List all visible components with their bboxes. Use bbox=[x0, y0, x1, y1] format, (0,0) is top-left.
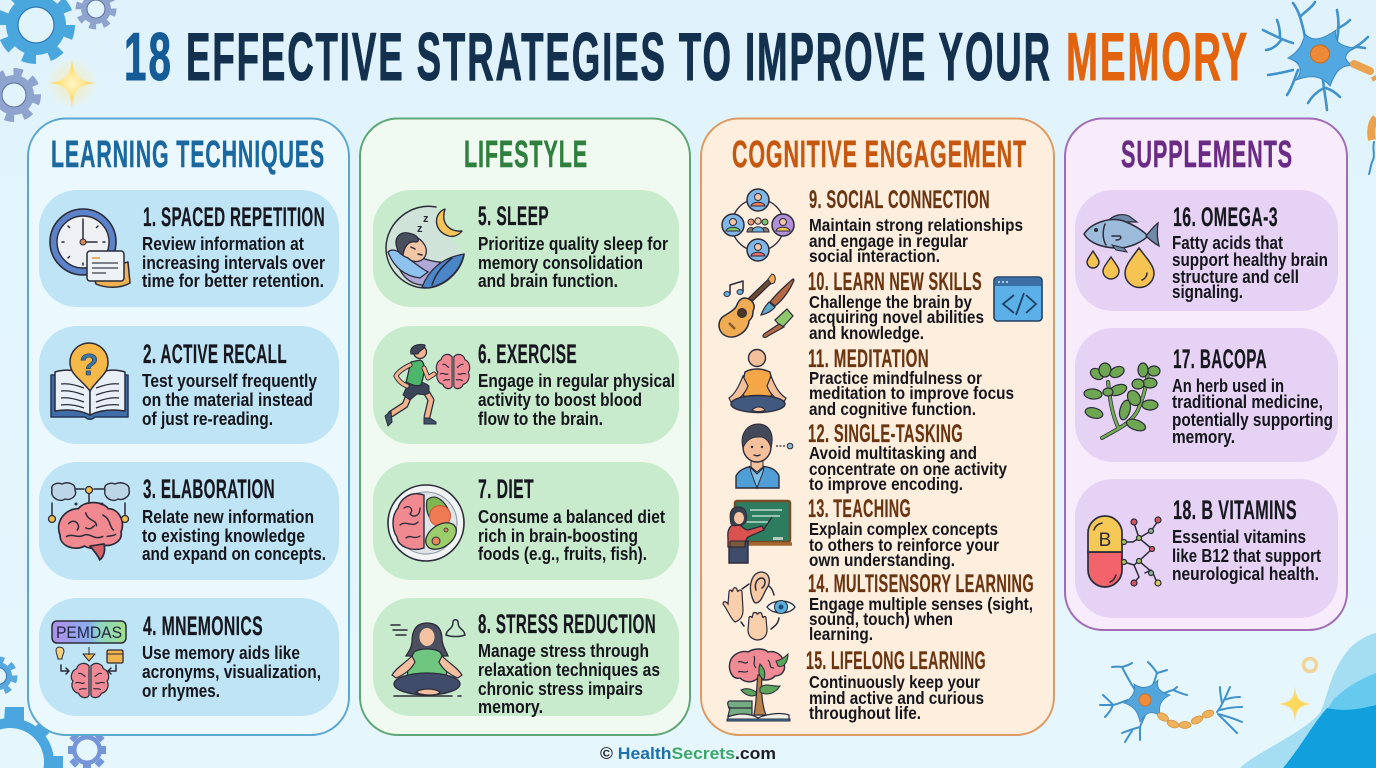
item text: signaling. bbox=[1172, 282, 1243, 302]
card: bacopa bbox=[1075, 328, 1338, 462]
item text: on the material instead bbox=[142, 390, 313, 410]
item text: Prioritize quality sleep for bbox=[478, 234, 668, 254]
icon: sleeping person and moon: z bbox=[417, 223, 423, 235]
item title: 7. DIET bbox=[478, 474, 534, 504]
item text: to others to reinforce your bbox=[809, 535, 999, 555]
item text: Manage stress through bbox=[478, 641, 649, 661]
item text: rich in brain-boosting bbox=[478, 526, 638, 546]
card: stress reduction bbox=[373, 598, 679, 717]
item: learn new skills bbox=[719, 268, 1042, 343]
card: omega-3 bbox=[1075, 190, 1338, 311]
item title: 18. B VITAMINS bbox=[1173, 495, 1297, 525]
icon: fish and oil drops bbox=[1084, 215, 1159, 288]
item text: Engage in regular physical bbox=[478, 371, 675, 391]
item text bbox=[1172, 527, 1321, 584]
item text: Explain complex concepts bbox=[809, 519, 998, 539]
item text: concentrate on one activity bbox=[809, 459, 1007, 479]
icon: meditating woman bbox=[391, 620, 465, 696]
icon: runner and brain bbox=[385, 344, 470, 426]
footer: copyright: © HealthSecrets.com bbox=[600, 744, 776, 763]
card: exercise bbox=[373, 326, 679, 444]
item text: Essential vitamins bbox=[1172, 527, 1306, 547]
item text: to improve encoding. bbox=[809, 474, 963, 494]
icon: vitamin pill and molecule bbox=[1088, 516, 1161, 587]
item text bbox=[478, 371, 675, 429]
item title: 14. MULTISENSORY LEARNING bbox=[808, 570, 1034, 598]
item title: 6. EXERCISE bbox=[478, 339, 577, 369]
item text: Challenge the brain by bbox=[809, 292, 972, 312]
item text: mind active and curious bbox=[809, 688, 984, 708]
item text: support healthy brain bbox=[1172, 250, 1328, 270]
icon: PEMDAS and brain bbox=[52, 621, 126, 698]
icon: senses bbox=[723, 572, 795, 640]
item text: or rhymes. bbox=[142, 681, 220, 701]
item text: neurological health. bbox=[1172, 564, 1319, 584]
card: sleep bbox=[373, 190, 679, 307]
item text: flow to the brain. bbox=[478, 409, 603, 429]
item: social connection bbox=[722, 186, 1023, 266]
item text bbox=[478, 234, 668, 291]
item text: memory. bbox=[478, 697, 543, 717]
item text: and cognitive function. bbox=[809, 399, 976, 419]
item title: 1. SPACED REPETITION bbox=[143, 202, 325, 232]
panel: supplements bbox=[1065, 118, 1347, 630]
item text: activity to boost blood bbox=[478, 390, 642, 410]
item text: traditional medicine, bbox=[1172, 392, 1323, 412]
item: lifelong learning bbox=[727, 647, 986, 723]
decoration: top-right neuron bbox=[1263, 2, 1376, 174]
item text: Use memory aids like bbox=[142, 643, 300, 663]
icon: social network bbox=[722, 189, 794, 261]
icon: sleeping person and moon: z bbox=[423, 213, 429, 225]
item text: relaxation techniques as bbox=[478, 660, 660, 680]
item text: to existing knowledge bbox=[142, 526, 305, 546]
item title: 15. LIFELONG LEARNING bbox=[806, 647, 986, 675]
icon: sleeping person and moon bbox=[386, 206, 464, 288]
item text: Engage multiple senses (sight, bbox=[809, 594, 1033, 614]
item text: increasing intervals over bbox=[142, 253, 325, 273]
item title: 16. OMEGA-3 bbox=[1173, 202, 1278, 232]
item text: of just re-reading. bbox=[142, 409, 273, 429]
card: spaced repetition bbox=[39, 190, 339, 307]
item text: social interaction. bbox=[809, 246, 940, 266]
decoration: bottom-right waves bbox=[1240, 633, 1376, 768]
item text: memory. bbox=[1172, 427, 1235, 447]
item text bbox=[142, 643, 321, 701]
icon: brain tree on book bbox=[727, 649, 790, 721]
icon: clock and cards bbox=[50, 209, 130, 287]
item title: 10. LEARN NEW SKILLS bbox=[808, 268, 982, 296]
item: multisensory learning bbox=[723, 570, 1034, 644]
icon: brain food plate bbox=[388, 485, 464, 561]
icon: open book with question mark bbox=[51, 343, 128, 419]
item text bbox=[1172, 233, 1328, 302]
item text: and expand on concepts. bbox=[142, 544, 326, 564]
item text: Avoid multitasking and bbox=[809, 443, 977, 463]
icon: PEMDAS and brain: PEMDAS bbox=[56, 623, 122, 642]
item text bbox=[809, 215, 1023, 266]
decoration: bottom neuron, sparkle and ring bbox=[1100, 658, 1316, 742]
item text bbox=[809, 368, 1014, 419]
item text: and engage in regular bbox=[809, 231, 968, 251]
item text: and brain function. bbox=[478, 271, 618, 291]
icon: teacher at board bbox=[728, 501, 792, 563]
item: meditation bbox=[729, 345, 1014, 419]
item text bbox=[478, 641, 660, 717]
heading: learning techniques: LEARNING TECHNIQUES bbox=[51, 134, 325, 176]
item text bbox=[478, 507, 665, 564]
item text: throughout life. bbox=[809, 703, 921, 723]
item text: Maintain strong relationships bbox=[809, 215, 1023, 235]
item text: foods (e.g., fruits, fish). bbox=[478, 544, 647, 564]
item text: time for better retention. bbox=[142, 271, 324, 291]
item: teaching bbox=[728, 495, 999, 570]
item text: Review information at bbox=[142, 234, 304, 254]
item text: structure and cell bbox=[1172, 267, 1299, 287]
item text: An herb used in bbox=[1172, 376, 1284, 396]
item title: 3. ELABORATION bbox=[143, 474, 275, 504]
item text: acquiring novel abilities bbox=[809, 307, 984, 327]
item text: acronyms, visualization, bbox=[142, 662, 321, 682]
item text: and knowledge. bbox=[809, 323, 924, 343]
icon: guitar, notes and brushes bbox=[719, 274, 794, 337]
icon: vitamin pill and molecule: B bbox=[1099, 530, 1111, 551]
panel: lifestyle bbox=[360, 118, 690, 735]
title: 18 bbox=[124, 19, 173, 95]
item text: potentially supporting bbox=[1172, 410, 1333, 430]
item text bbox=[809, 292, 984, 343]
item text: Practice mindfulness or bbox=[809, 368, 982, 388]
icon: open book with question mark: ? bbox=[80, 347, 98, 382]
item text bbox=[142, 371, 317, 429]
item text: Relate new information bbox=[142, 507, 314, 527]
decoration: top-left gears and sparkle bbox=[0, 0, 113, 118]
card: elaboration bbox=[39, 462, 339, 580]
item text: meditation to improve focus bbox=[809, 383, 1014, 403]
item text: sound, touch) when bbox=[809, 609, 953, 629]
item text bbox=[809, 594, 1033, 644]
item title: 4. MNEMONICS bbox=[143, 611, 263, 641]
panel: cognitive engagement bbox=[701, 118, 1054, 735]
icon: code window bbox=[994, 277, 1042, 321]
heading: lifestyle: LIFESTYLE bbox=[464, 134, 588, 176]
item title: 8. STRESS REDUCTION bbox=[478, 609, 656, 639]
item text: Fatty acids that bbox=[1172, 233, 1283, 253]
item text bbox=[809, 672, 984, 723]
icon: bacopa herb bbox=[1084, 363, 1160, 438]
icon: meditating person bbox=[729, 350, 786, 412]
item title: 2. ACTIVE RECALL bbox=[143, 339, 287, 369]
item text: own understanding. bbox=[809, 550, 955, 570]
item: single-tasking bbox=[736, 420, 1007, 494]
panel: learning techniques bbox=[28, 118, 349, 735]
item text: memory consolidation bbox=[478, 253, 643, 273]
item title: 11. MEDITATION bbox=[808, 345, 929, 373]
item text: like B12 that support bbox=[1172, 546, 1321, 566]
card: mnemonics bbox=[39, 598, 339, 716]
item text bbox=[809, 443, 1007, 494]
item title: 13. TEACHING bbox=[808, 495, 911, 523]
item text: Test yourself frequently bbox=[142, 371, 317, 391]
item text: learning. bbox=[809, 624, 873, 644]
item text: chronic stress impairs bbox=[478, 679, 643, 699]
card: active recall bbox=[39, 326, 339, 444]
item title: 12. SINGLE-TASKING bbox=[808, 420, 963, 448]
item text bbox=[1172, 376, 1333, 447]
card: diet bbox=[373, 462, 679, 580]
item text bbox=[809, 519, 999, 570]
icon: focused person bbox=[736, 424, 793, 488]
item title: 17. BACOPA bbox=[1173, 344, 1267, 374]
item text: Consume a balanced diet bbox=[478, 507, 665, 527]
heading: cognitive engagement: COGNITIVE ENGAGEMENT bbox=[732, 134, 1027, 176]
item title: 9. SOCIAL CONNECTION bbox=[809, 186, 990, 214]
card: b vitamins bbox=[1075, 479, 1338, 618]
item title: 5. SLEEP bbox=[478, 201, 549, 231]
item text: Continuously keep your bbox=[809, 672, 980, 692]
decoration: bottom-left gears bbox=[0, 660, 106, 768]
item text bbox=[142, 507, 326, 564]
item text bbox=[142, 234, 325, 291]
icon: brain with thought clouds bbox=[48, 483, 129, 560]
